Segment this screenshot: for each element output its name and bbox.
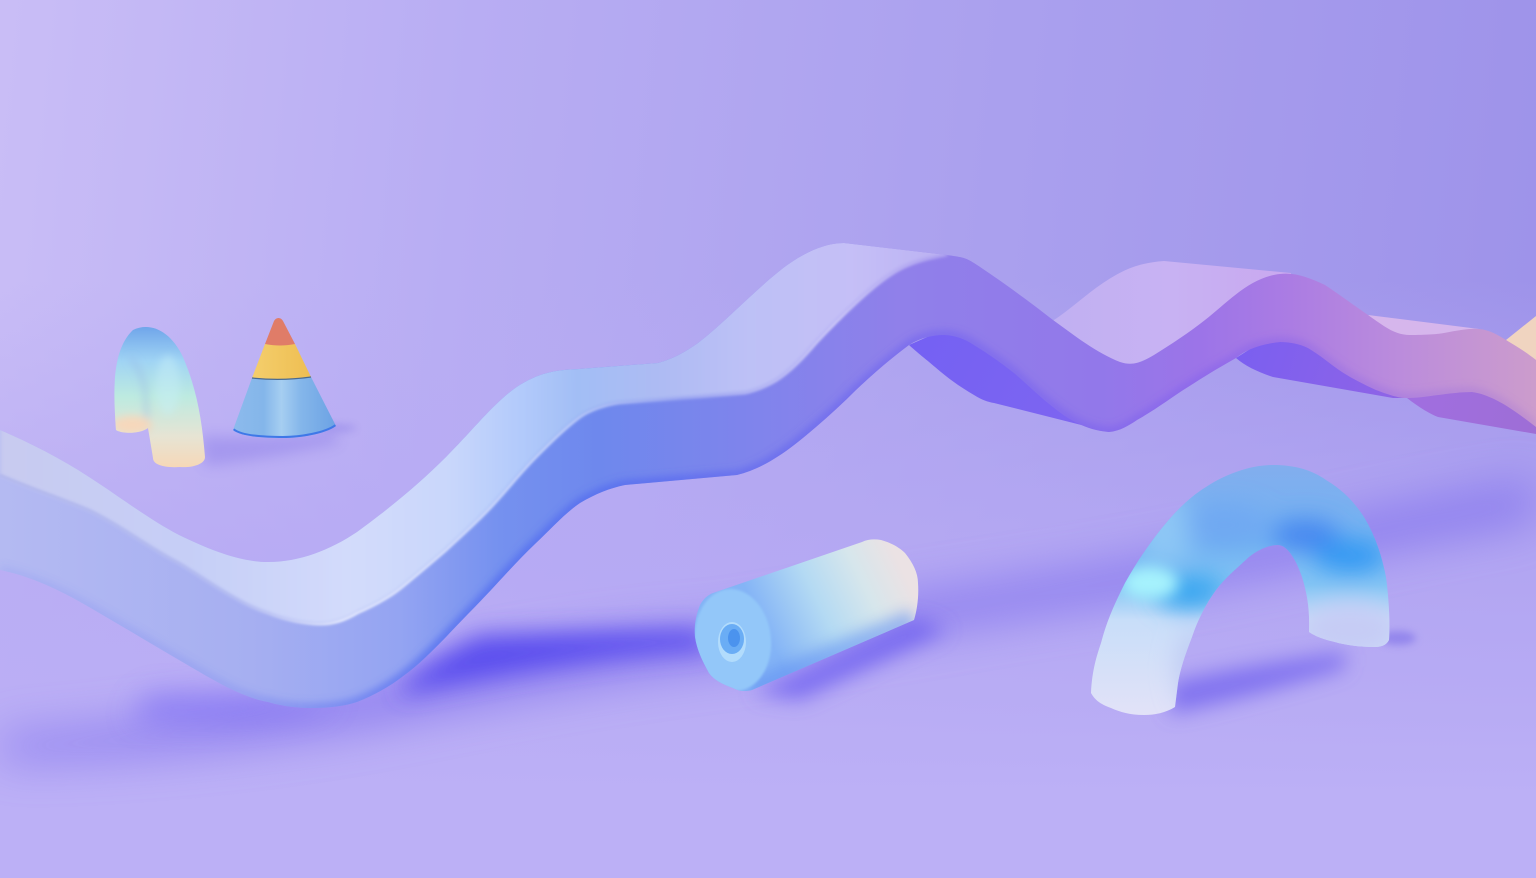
arch body	[114, 327, 205, 468]
large arch	[1085, 460, 1400, 720]
arch colour glows	[1142, 505, 1389, 695]
shadow: ribbon on floor	[0, 480, 1536, 760]
shadow: small arch and cone	[200, 424, 356, 466]
ribbon top face	[0, 200, 947, 624]
cone band divider	[252, 377, 311, 379]
arch body	[1085, 460, 1395, 720]
ribbon: underside 1	[909, 330, 1109, 432]
cone blue base	[233, 377, 336, 438]
ribbon front face	[0, 243, 1536, 708]
arch cyan highlight	[1122, 567, 1178, 599]
ribbon: underside 2	[1236, 330, 1407, 398]
small arch	[114, 327, 205, 468]
cylinder body	[694, 539, 918, 691]
ribbon: far peach end	[1506, 316, 1536, 365]
cylinder end cap	[694, 589, 772, 690]
ribbon: far top face 1	[1051, 261, 1291, 370]
ribbon: main body	[0, 243, 1536, 708]
cone	[230, 318, 340, 440]
arch inner shading and highlight	[112, 355, 180, 434]
shadow: large arch	[1170, 631, 1416, 714]
cylinder	[694, 539, 918, 691]
ribbon: underside 3	[1407, 385, 1536, 434]
shadow: cylinder	[752, 618, 948, 700]
ribbon lower edge shading	[0, 335, 1536, 708]
ribbon crease highlight	[0, 255, 947, 624]
ribbon: far top face 2	[1368, 315, 1479, 345]
cylinder hole	[718, 622, 746, 662]
cylinder lower shading	[752, 620, 914, 690]
cone red tip	[265, 318, 295, 346]
cone yellow band	[252, 344, 311, 379]
